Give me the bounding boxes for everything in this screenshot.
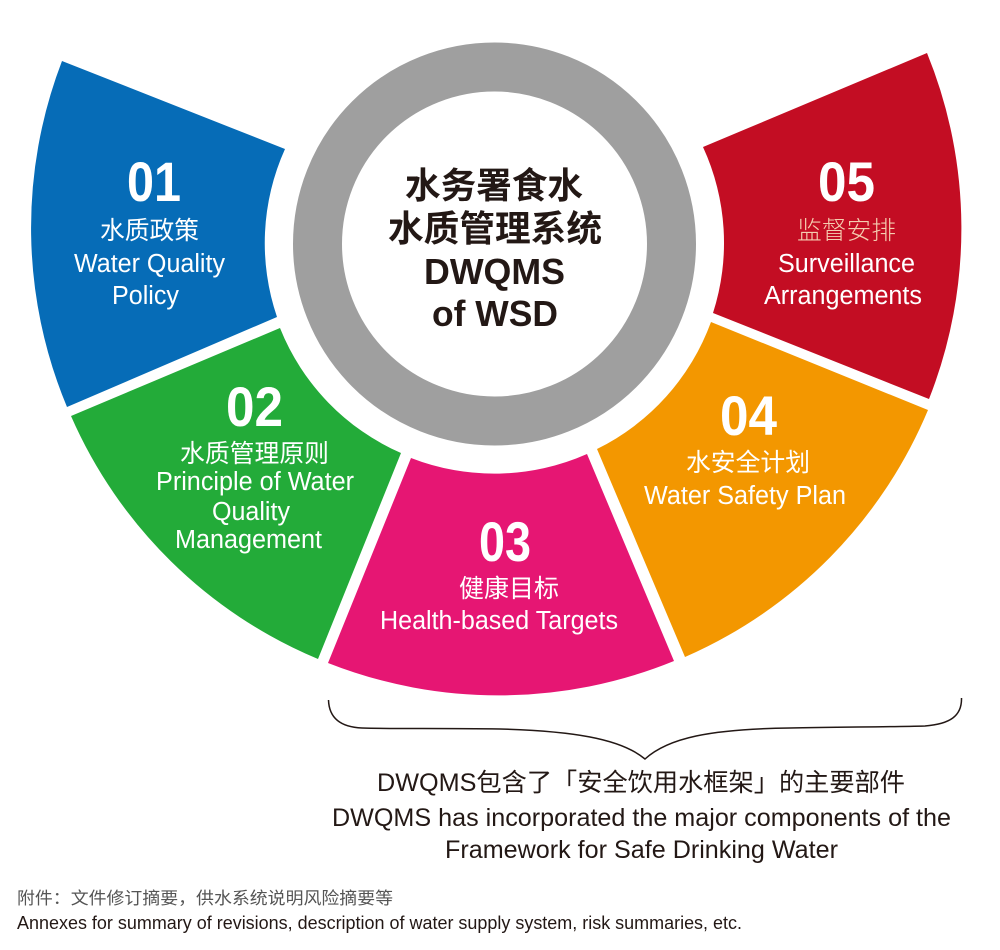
panel: 01 Water Quality Policy [31,61,285,407]
panel: 03 Health-based Targets: 健康目标 [459,575,559,603]
panel: 04 Water Safety Plan: 水安全计划 [686,449,810,477]
centre ring [318,67,672,421]
centre title [388,165,602,334]
centre title: 水质管理系统 [388,208,602,249]
caption: DWQMS包含了「安全饮用水框架」的主要部件 [377,769,905,797]
panel: 01 Water Quality Policy: Policy [112,282,179,310]
panel: 04 Water Safety Plan: 04 [720,384,777,447]
panel: 02 Principle of Water Quality Management: Management [175,526,322,554]
panel: 02 Principle of Water Quality Management [71,328,401,659]
panel: 01 Water Quality Policy: 水质政策 [100,217,199,245]
panel: 01 Water Quality Policy: Water Quality [74,250,225,278]
panel: 01 Water Quality Policy: 01 [127,150,181,213]
caption: DWQMS has incorporated the major components of the [332,804,951,832]
panel: 02 Principle of Water Quality Management: Principle of Water [156,468,354,496]
panel: 02 Principle of Water Quality Management: 02 [226,375,283,438]
panel: 04 Water Safety Plan: Water Safety Plan [644,482,846,510]
centre title: of WSD [432,293,558,334]
panel: 05 Surveillance Arrangements: Surveillance [778,250,915,278]
panel: 05 Surveillance Arrangements: Arrangements [764,282,922,310]
centre title: 水务署食水 [405,165,583,206]
caption [332,769,951,864]
footnote [17,889,742,933]
footnote: 附件：文件修订摘要，供水系统说明风险摘要等 [17,889,393,908]
panel: 02 Principle of Water Quality Management: 水质管理原则 [180,440,329,468]
panel: 03 Health-based Targets: 03 [479,510,531,573]
centre title: DWQMS [424,251,565,292]
brace [328,698,962,759]
footnote: Annexes for summary of revisions, description of water supply system, risk summaries, etc. [17,913,742,933]
panel: 05 Surveillance Arrangements [703,53,961,399]
panel: 03 Health-based Targets [328,454,674,695]
panel: 03 Health-based Targets: Health-based Targets [380,607,618,635]
panel: 04 Water Safety Plan [597,322,928,657]
panel: 02 Principle of Water Quality Management: Quality [212,498,290,526]
panel: 05 Surveillance Arrangements: 监督安排 [797,217,896,245]
panel: 05 Surveillance Arrangements: 05 [818,150,875,213]
caption: Framework for Safe Drinking Water [445,836,838,864]
